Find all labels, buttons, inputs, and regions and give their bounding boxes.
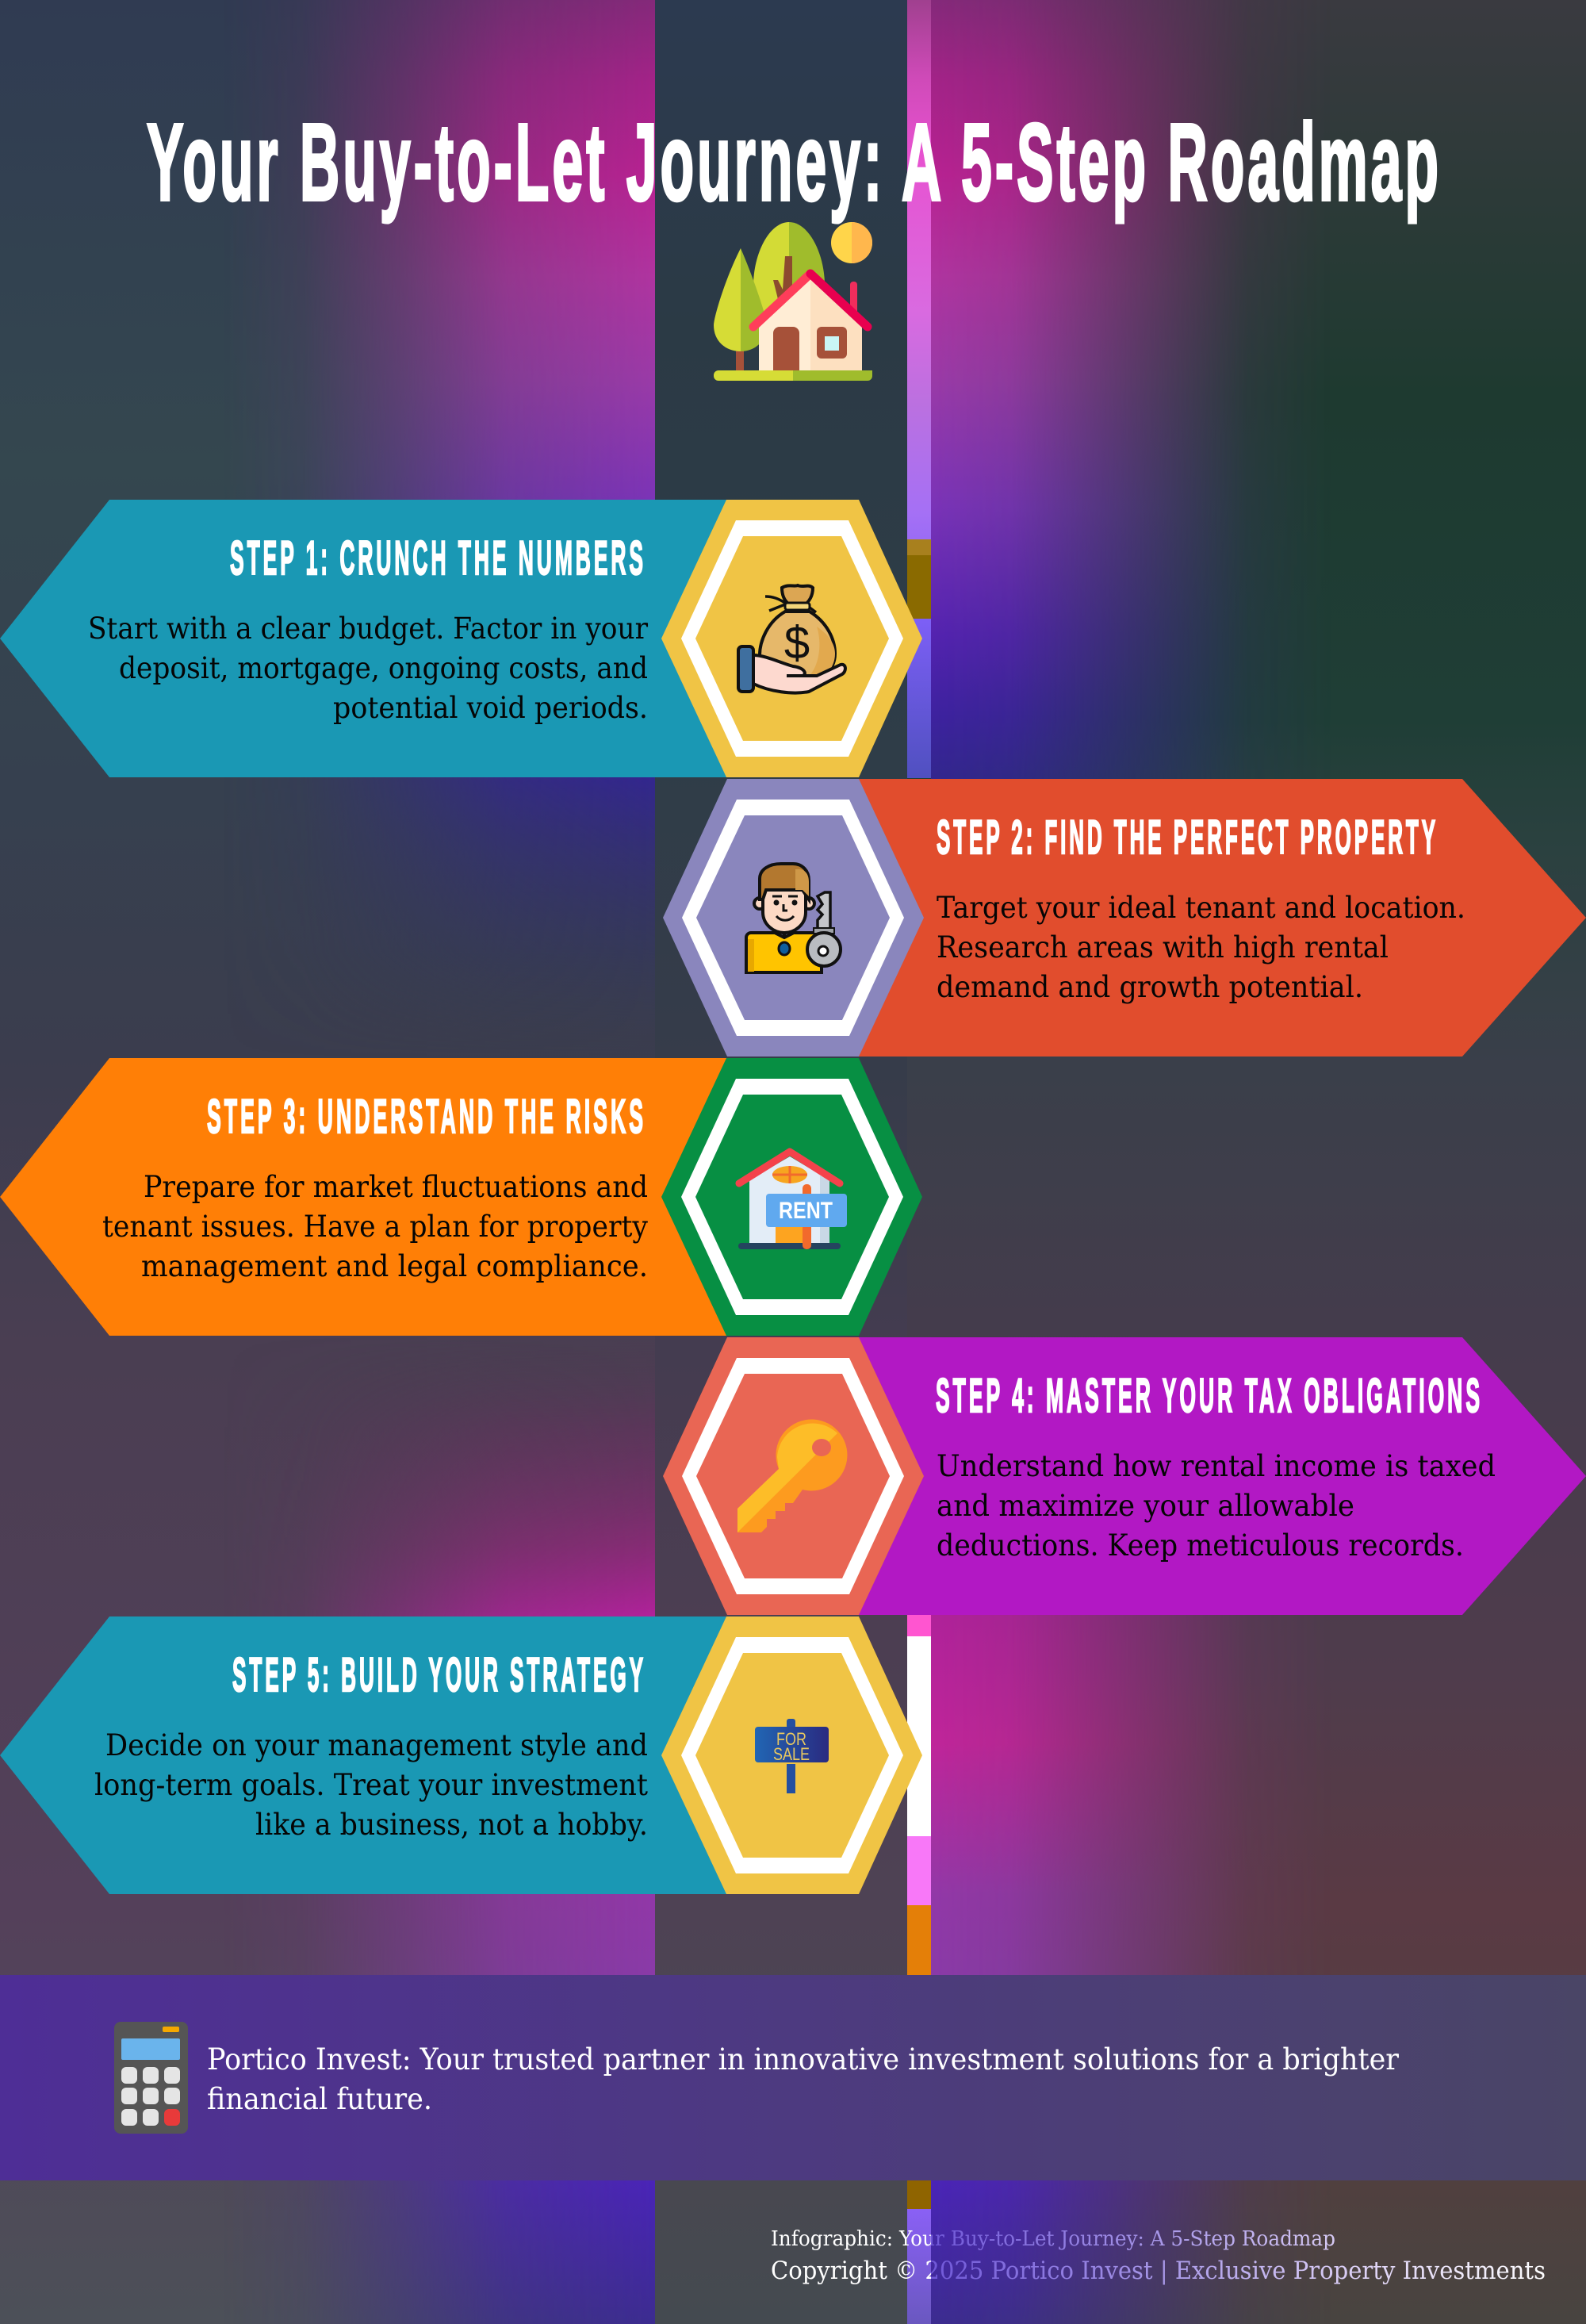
icon: calculator [114,2022,188,2134]
panel: step 3 [0,1058,922,1336]
icon: house with trees and sun [714,222,872,381]
step 5 description: like a business, not a hobby. [255,1808,648,1842]
icon: for sale sign [755,1719,829,1793]
step 4 hexagon [663,1337,924,1615]
step 3 hexagon [661,1058,922,1336]
step 3 description: management and legal compliance. [141,1249,648,1283]
step 2 arrow [849,779,1586,1057]
step 5 hexagon [661,1616,922,1894]
icon: key [737,1419,847,1532]
step 4 description: deductions. Keep meticulous records. [937,1528,1464,1563]
icon: house with rent sign [738,1152,847,1249]
step 3 description [102,1170,648,1283]
footer text: Infographic: Your Buy-to-Let Journey: A 5-Step Roadmap [771,2227,1335,2251]
panel: company banner [0,1975,1586,2180]
panel: step 5: STEP 5: BUILD YOUR STRATEGY [232,1648,646,1701]
step 5 arrow [0,1616,737,1894]
step 5 description [94,1728,648,1842]
step 5 description: long-term goals. Treat your investment [94,1768,648,1802]
step 4 arrow [849,1337,1586,1615]
panel: step 1 [0,500,922,777]
banner text: Portico Invest: Your trusted partner in innovative investment solutions for a brighter [207,2042,1399,2077]
icon: money bag in hand: $ [784,617,810,669]
icon: for sale sign: SALE [773,1744,810,1764]
step 1 description [88,612,648,725]
step 2 description: demand and growth potential. [937,970,1363,1004]
icon: house with rent sign: RENT [779,1198,833,1224]
icon: money bag in hand [738,585,845,693]
step 1 hexagon [661,500,922,777]
step 4 description: Understand how rental income is taxed [937,1449,1496,1483]
step 3 description: Prepare for market fluctuations and [144,1170,648,1204]
panel: step 4 [663,1337,1586,1615]
step 5 description: Decide on your management style and [105,1728,648,1762]
banner text: financial future. [207,2082,432,2116]
panel: step 1: STEP 1: CRUNCH THE NUMBERS [230,531,646,585]
footer text [771,2227,1546,2285]
panel: step 2 [663,779,1586,1057]
step 3 arrow [0,1058,737,1336]
footer text: Copyright © 2025 Portico Invest | Exclusive Property Investments [771,2257,1546,2285]
step 2 description [937,891,1465,1004]
banner text [207,2042,1399,2116]
icon: agent with key [746,864,841,972]
step 2 description: Target your ideal tenant and location. [937,891,1465,925]
step 4 description [937,1449,1496,1563]
step 1 description: Start with a clear budget. Factor in your [88,612,648,646]
step 1 arrow [0,500,737,777]
icon: for sale sign: FOR [776,1729,806,1749]
step 3 description: tenant issues. Have a plan for property [102,1210,648,1244]
step 1 description: potential void periods. [333,691,648,725]
step 2 description: Research areas with high rental [937,930,1389,964]
panel: step 3: STEP 3: UNDERSTAND THE RISKS [207,1090,646,1143]
step 4 description: and maximize your allowable [937,1489,1354,1523]
step 2 hexagon [663,779,924,1057]
panel: step 5 [0,1616,922,1894]
step 1 description: deposit, mortgage, ongoing costs, and [119,651,648,685]
